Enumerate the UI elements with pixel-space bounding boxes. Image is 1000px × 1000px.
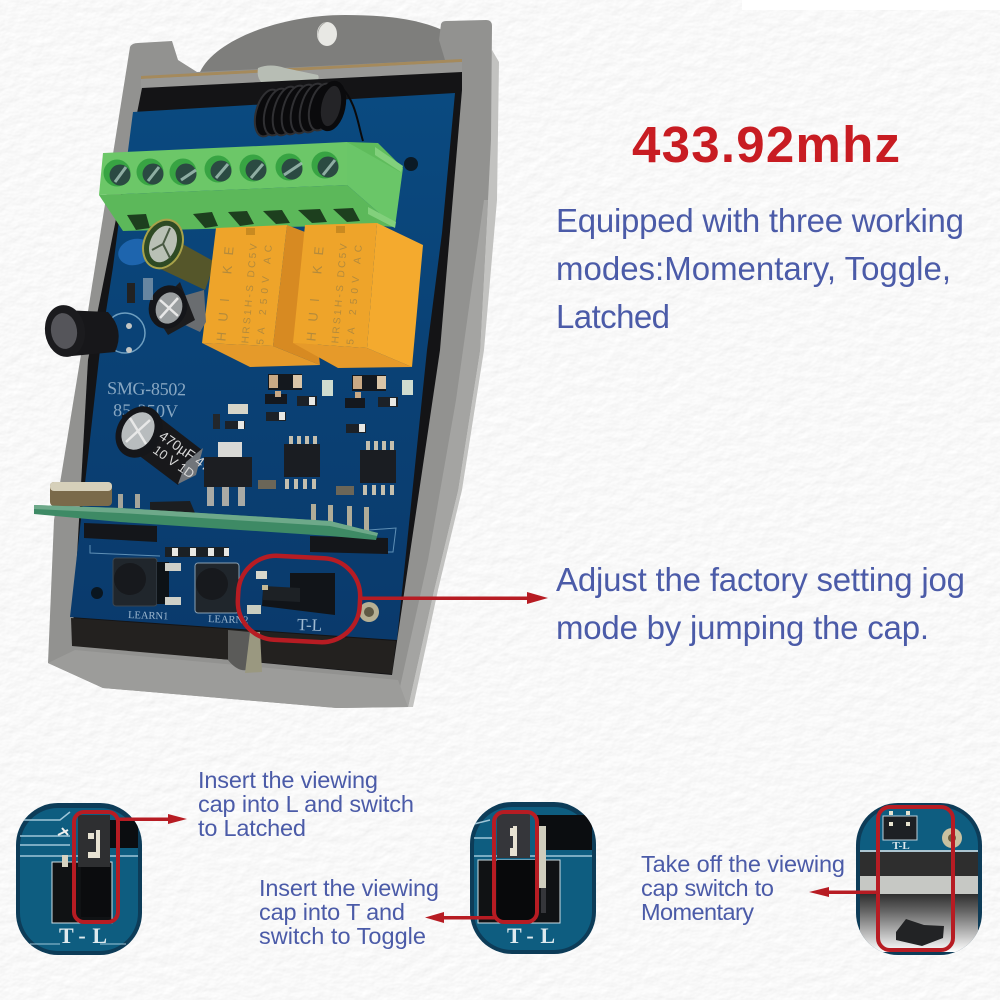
relay: left — [202, 225, 320, 367]
text block: working modes: Equipped with three working — [556, 202, 964, 239]
capacitor 470uF: 10 V 1D — [150, 442, 197, 481]
housing: outer frame — [48, 20, 499, 708]
receiver module with crystal — [34, 482, 388, 554]
text block: working modes: Latched — [556, 298, 670, 335]
housing: rear arc with mounting hole — [200, 15, 450, 84]
small surface-mount parts — [165, 374, 413, 557]
callout: toggle frame and arrow — [425, 812, 537, 923]
housing: dark inner cavity — [72, 72, 462, 675]
text: momentary instruction: cap switch to — [641, 875, 774, 901]
text: momentary instruction: Take off the viewing — [641, 851, 845, 877]
relay: right — [293, 223, 423, 368]
blue capacitor — [115, 235, 155, 269]
relay: right: 5A 250V AC — [345, 245, 365, 345]
panel: latched jumper photo — [16, 803, 142, 955]
control chip 1 — [284, 436, 320, 489]
text: toggle instruction: Insert the viewing — [259, 875, 439, 901]
panel: momentary jumper photo — [856, 803, 982, 955]
text: latched instruction: to Latched — [198, 815, 306, 841]
callout ring around jumper — [236, 554, 362, 644]
circuit board — [70, 93, 455, 640]
electrolytic capacitor: green top — [136, 214, 215, 290]
text: latched instruction: cap into L and switch — [198, 791, 414, 817]
terminal block: seven green screw terminals — [99, 142, 403, 231]
panel: toggle jumper photo: T-L — [507, 923, 555, 948]
callout: momentary frame and arrow — [809, 807, 953, 950]
text block: jumper adjustment: Adjust the factory setting jog — [556, 561, 965, 598]
relay: left: HRS1H-S DC5V — [240, 243, 260, 344]
board silk label: SMG-8502 85-250V: 85-250V — [113, 400, 178, 421]
lower cavity clip — [71, 618, 396, 674]
text block: working modes: modes:Momentary, Toggle, — [556, 250, 951, 287]
buttons LEARN1 and LEARN2 — [113, 558, 249, 626]
capacitor 470uF — [106, 397, 214, 485]
capacitor 470uF: 470µF 47 — [156, 427, 214, 475]
panel: latched jumper photo: T-L — [59, 923, 107, 948]
text: toggle instruction: switch to Toggle — [259, 923, 426, 949]
buttons LEARN1 and LEARN2: LEARN2 — [208, 614, 249, 626]
board silk label: SMG-8502 85-250V: SMG-8502 — [107, 378, 186, 399]
control chip 2 — [360, 441, 396, 495]
text: toggle instruction — [259, 875, 439, 949]
text: momentary instruction — [641, 851, 845, 925]
relay: left: 5A 250V AC — [255, 245, 275, 345]
arrow: ring to adjust note — [360, 592, 548, 604]
antenna coil — [250, 81, 363, 141]
jumper with T-L silk label and screw — [247, 571, 379, 635]
relay: right: HUI KE — [303, 246, 327, 342]
callout: latched frame and arrow — [74, 812, 187, 922]
text: latched instruction: Insert the viewing — [198, 767, 378, 793]
title: 433.92mhz: 433.92mhz — [632, 116, 900, 173]
capacitor and heat sink beside relays — [105, 278, 206, 353]
text: momentary instruction: Momentary — [641, 899, 754, 925]
panel: toggle jumper photo — [470, 802, 596, 954]
board silk label: SMG-8502 85-250V — [107, 378, 186, 421]
device: receiver board in grey housing — [34, 15, 499, 708]
text block: jumper adjustment: mode by jumping the cap. — [556, 609, 929, 646]
text: latched instruction — [198, 767, 414, 841]
buttons LEARN1 and LEARN2: LEARN1 — [128, 610, 169, 622]
black sensor lens — [42, 302, 119, 360]
relay: left: HUI KE — [213, 246, 237, 342]
text: toggle instruction: cap into T and — [259, 899, 405, 925]
jumper with T-L silk label and screw: T-L — [297, 615, 322, 635]
regulator chip — [204, 442, 252, 506]
relay: right: HRS1H-S DC5V — [330, 243, 350, 344]
text block: jumper adjustment — [556, 561, 965, 646]
panel: momentary jumper photo: T-L — [892, 840, 910, 852]
text block: working modes — [556, 202, 964, 335]
